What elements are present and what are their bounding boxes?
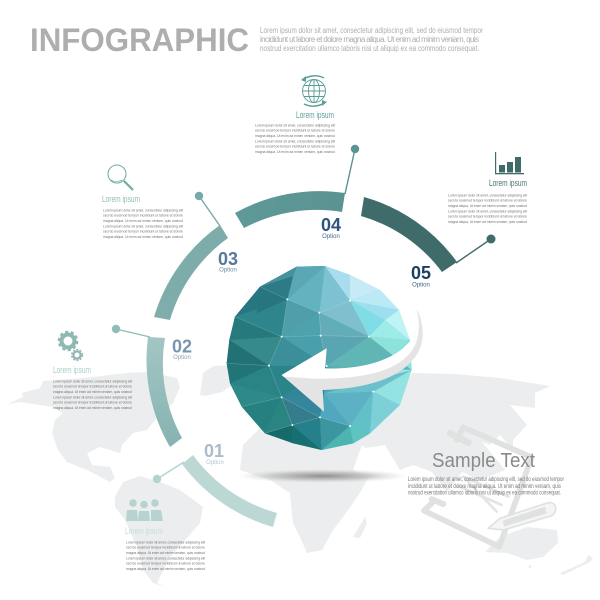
option 02 text: magna aliqua. Ut enim ad minim veniam, quis nostrud — [53, 390, 132, 394]
number 04: Option — [322, 234, 340, 240]
option 03 text: Lorem ipsum dolor sit amet, consectetur adipiscing elit — [103, 208, 183, 212]
option 01 text: sed do eiusmod tempor incididunt ut labore et dolore — [126, 562, 205, 566]
pin 05 — [456, 234, 496, 263]
number 02: Option — [173, 355, 191, 361]
option 01 text: Lorem ipsum dolor sit amet, consectetur adipiscing elit — [126, 556, 205, 560]
option 04 text: magna aliqua. Ut enim ad minim veniam, quis nostrud — [255, 134, 335, 138]
option 01 text: magna aliqua. Ut enim ad minim veniam, quis nostrud — [126, 551, 205, 555]
arc 05 — [361, 197, 457, 272]
option 05 text: sed do eiusmod tempor incididunt ut labore et dolore — [448, 215, 527, 219]
option 04 text: sed do eiusmod tempor incididunt ut labore et dolore — [255, 129, 335, 133]
world map — [8, 365, 593, 587]
arc 04 — [235, 191, 345, 228]
option 02 text — [53, 380, 132, 410]
icon: magnifier — [108, 165, 133, 190]
option 05 text: Lorem ipsum dolor sit amet, consectetur adipiscing elit — [448, 194, 527, 198]
option 03 text: magna aliqua. Ut enim ad minim veniam, quis nostrud — [103, 235, 183, 239]
option 02 text: Lorem ipsum dolor sit amet, consectetur adipiscing elit — [53, 396, 132, 400]
number 02: 02 — [172, 336, 192, 356]
number 05: Option — [412, 282, 430, 288]
icon: gears — [59, 332, 82, 360]
globe shadow — [236, 469, 408, 483]
option 05 text: Lorem ipsum dolor sit amet, consectetur adipiscing elit — [448, 210, 527, 214]
intro paragraph: nostrud exercitation ullamco laboris nisi ut aliquip ex ea commodo consequat. — [260, 44, 479, 53]
option 05 text: sed do eiusmod tempor incididunt ut labore et dolore — [448, 199, 527, 203]
option 04 text: Lorem ipsum dolor sit amet, consectetur adipiscing elit — [255, 140, 335, 144]
number 03: Option — [219, 268, 237, 274]
arc 01 — [182, 455, 277, 527]
globe mesh nodes — [268, 298, 374, 427]
polygon globe — [227, 266, 423, 450]
arc 03 — [154, 225, 228, 320]
number 04: 04 — [321, 215, 341, 235]
option 02 heading: Lorem ipsum — [53, 365, 91, 375]
title: INFOGRAPHIC — [30, 22, 249, 58]
pin 01 — [153, 462, 184, 483]
option 03 text: Lorem ipsum dolor sit amet, consectetur adipiscing elit — [103, 224, 183, 228]
sample text paragraph — [408, 476, 564, 496]
option 02 text: sed do eiusmod tempor incididunt ut labore et dolore — [53, 401, 132, 405]
arc 02 — [146, 337, 182, 447]
number 03: 03 — [218, 249, 238, 269]
option 04 text — [255, 124, 335, 154]
option 01 text: magna aliqua. Ut enim ad minim veniam, quis nostrud — [126, 567, 205, 571]
option 04 text: Lorem ipsum dolor sit amet, consectetur adipiscing elit — [255, 124, 335, 128]
option 04 heading: Lorem ipsum — [296, 110, 334, 120]
icon: clipboard — [424, 427, 556, 547]
option 03 text: magna aliqua. Ut enim ad minim veniam, quis nostrud — [103, 219, 183, 223]
option 03 text: sed do eiusmod tempor incididunt ut labore et dolore — [103, 214, 183, 218]
icon: pencil — [488, 503, 556, 530]
intro paragraph: incididunt ut labore et dolore magna aliqua. Ut enim ad minim veniam, quis — [260, 35, 479, 44]
icon: globe with arrows — [301, 76, 327, 106]
number 05: 05 — [411, 263, 431, 283]
option 05 text: magna aliqua. Ut enim ad minim veniam, quis nostrud — [448, 220, 527, 224]
number 01: Option — [206, 460, 224, 466]
icon: bar chart — [495, 152, 524, 174]
progress arcs — [146, 191, 457, 527]
option 04 text: magna aliqua. Ut enim ad minim veniam, quis nostrud — [255, 150, 335, 154]
connector pins — [112, 145, 496, 483]
option 05 text: magna aliqua. Ut enim ad minim veniam, quis nostrud — [448, 204, 527, 208]
option 02 text: Lorem ipsum dolor sit amet, consectetur adipiscing elit — [53, 380, 132, 384]
option 03 text — [103, 208, 183, 239]
pin 03 — [195, 192, 220, 226]
icon: people — [126, 499, 163, 521]
intro paragraph — [260, 26, 483, 53]
option 01 text — [126, 540, 205, 571]
option 02 text: magna aliqua. Ut enim ad minim veniam, quis nostrud — [53, 406, 132, 410]
option 05 text — [448, 194, 527, 224]
pin 02 — [112, 325, 150, 337]
option 03 heading: Lorem ipsum — [102, 194, 140, 204]
globe mesh lines — [227, 287, 369, 433]
option 05 heading: Lorem ipsum — [489, 178, 527, 188]
pin 04 — [345, 145, 359, 194]
number 01: 01 — [204, 441, 224, 461]
option 04 text: sed do eiusmod tempor incididunt ut labore et dolore — [255, 145, 335, 149]
option 01 text: sed do eiusmod tempor incididunt ut labore et dolore — [126, 546, 205, 550]
sample text heading: Sample Text — [432, 450, 535, 472]
option 01 heading: Lorem ipsum — [125, 526, 163, 536]
option 01 text: Lorem ipsum dolor sit amet, consectetur adipiscing elit — [126, 540, 205, 544]
intro paragraph: Lorem ipsum dolor sit amet, consectetur adipiscing elit, sed do eiusmod tempor — [260, 26, 483, 35]
option 03 text: sed do eiusmod tempor incididunt ut labore et dolore — [103, 230, 183, 234]
icon: swoosh arrow — [282, 308, 423, 412]
option 02 text: sed do eiusmod tempor incididunt ut labore et dolore — [53, 385, 132, 389]
